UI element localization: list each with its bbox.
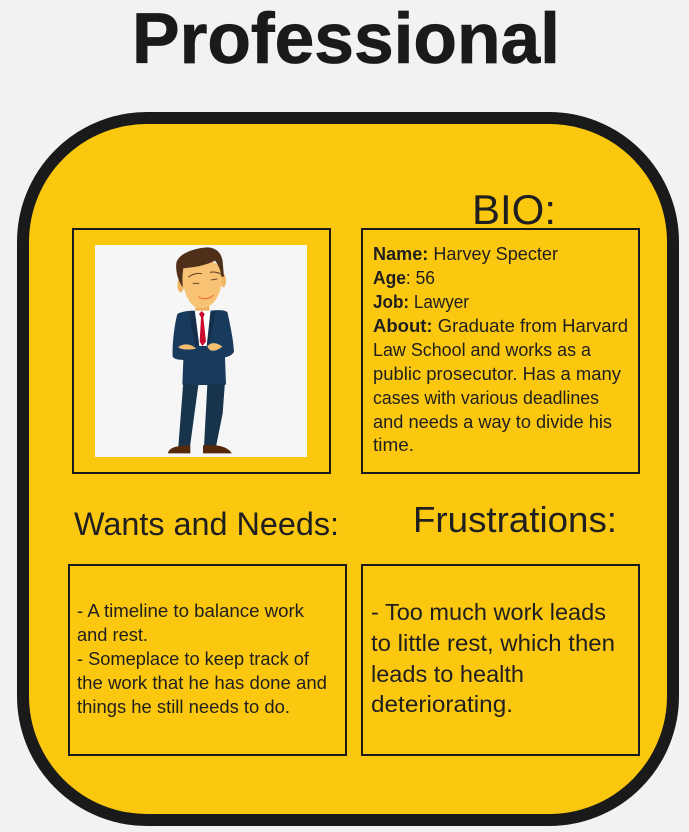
icon: businessman portrait — [95, 245, 307, 457]
heading: frustrations: Frustrations: — [413, 499, 617, 540]
text block: bio details: time. — [373, 435, 414, 455]
panel: persona card — [23, 118, 673, 820]
heading: wants and needs: Wants and Needs: — [74, 506, 339, 542]
text block: bio details: Age: 56 — [373, 268, 435, 288]
text block: frustrations list: leads to health — [371, 661, 524, 687]
panel: wants and needs box — [69, 565, 346, 755]
text block: bio details: Law School and works as a — [373, 340, 592, 360]
title: Professional — [132, 0, 560, 79]
text block: bio details: Name: Harvey Specter — [373, 244, 558, 264]
text block: bio details: cases with various deadlines — [373, 388, 599, 408]
text block: bio details — [373, 244, 628, 455]
text block: bio details: public prosecutor. Has a many — [373, 364, 621, 384]
text block: frustrations list — [371, 599, 615, 717]
text block: wants and needs list: - A timeline to balance work — [77, 601, 305, 621]
text block: wants and needs list — [77, 601, 327, 717]
panel: bio text box — [362, 229, 639, 473]
text block: frustrations list: - Too much work leads — [371, 599, 606, 625]
text block: wants and needs list: the work that he has done and — [77, 673, 327, 693]
text block: bio details: Job: Lawyer — [373, 292, 469, 312]
text block: bio details: and needs a way to divide his — [373, 412, 612, 432]
panel: frustrations box — [362, 565, 639, 755]
heading: bio: BIO: — [472, 186, 556, 233]
text block: bio details: About: Graduate from Harvard — [373, 316, 628, 336]
text block: frustrations list: deteriorating. — [371, 691, 513, 717]
text block: wants and needs list: - Someplace to keep track of — [77, 649, 310, 669]
text block: frustrations list: to little rest, which then — [371, 630, 615, 656]
panel: portrait frame — [73, 229, 330, 473]
text block: wants and needs list: and rest. — [77, 625, 148, 645]
text block: wants and needs list: things he still needs to do. — [77, 697, 290, 717]
